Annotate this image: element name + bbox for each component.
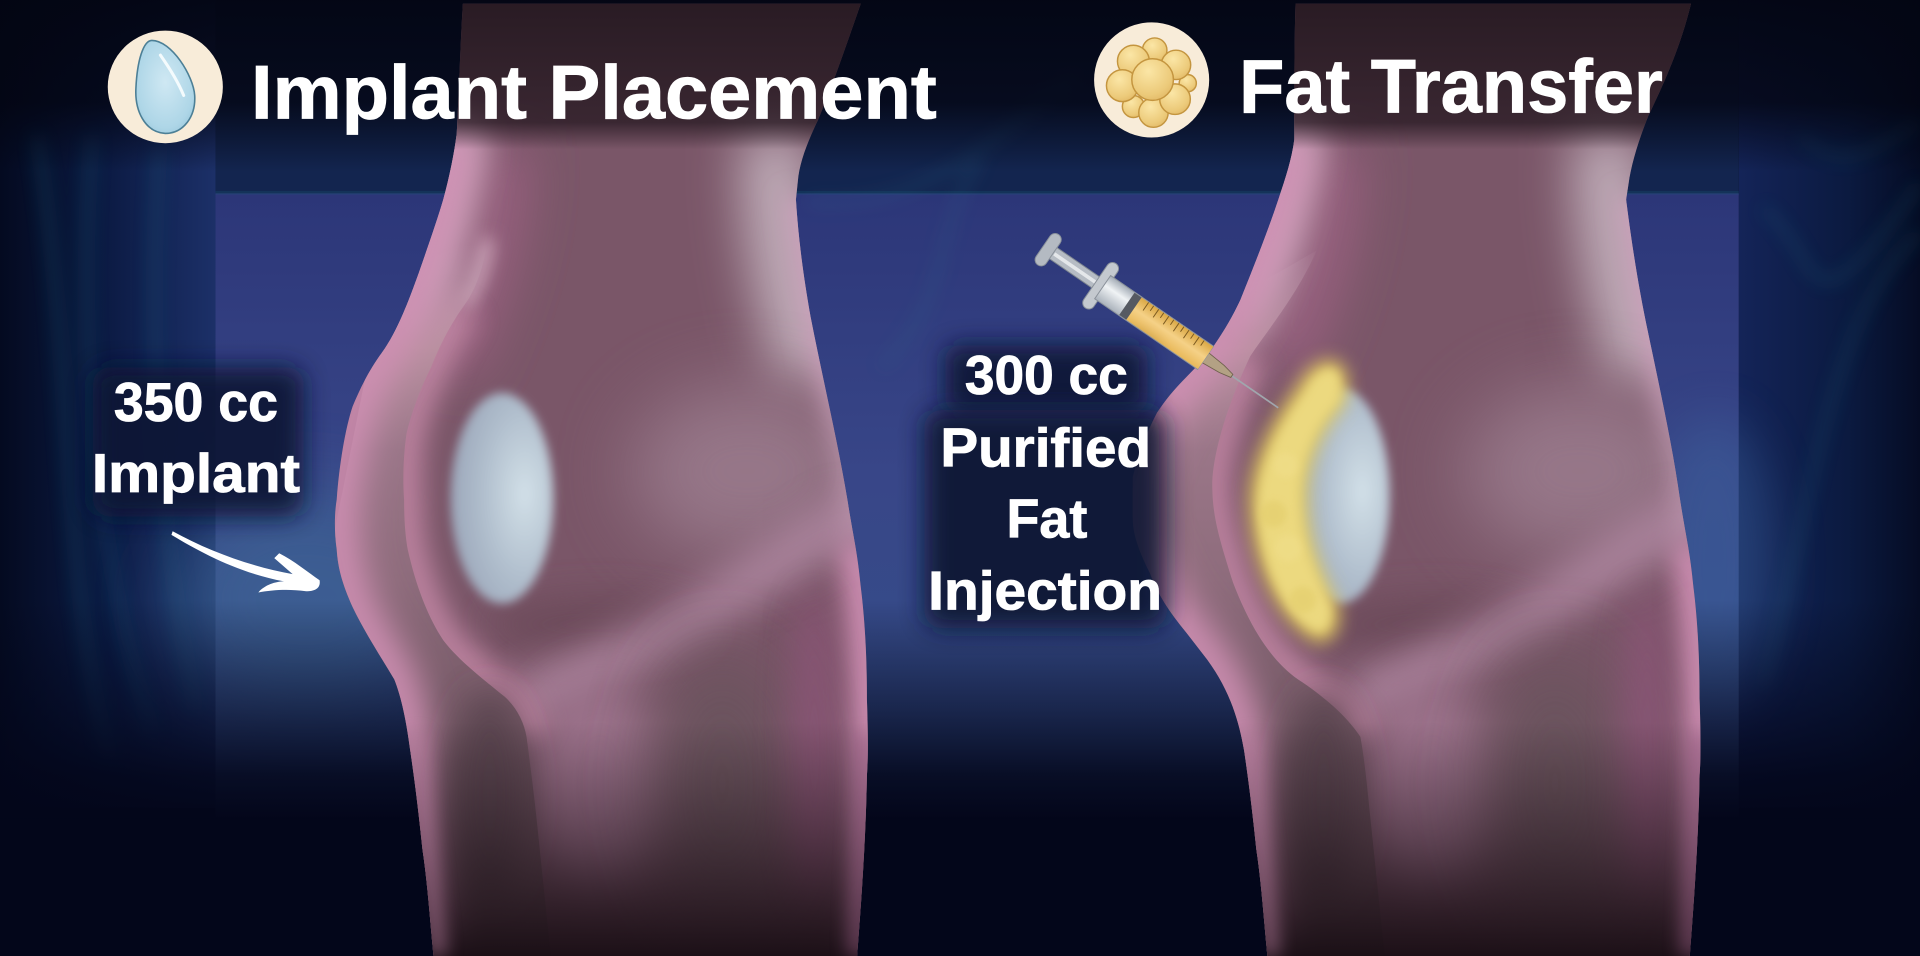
implant: right figure: [1292, 388, 1390, 603]
needle: [1228, 373, 1278, 408]
label: 300 cc Purified Fat Injection: Purified: [940, 416, 1151, 478]
plunger flange: [1033, 231, 1064, 268]
heading: Implant Placement: Implant Placement: [251, 51, 937, 136]
hub: [1200, 351, 1235, 381]
label: 300 cc Purified Fat Injection: Injection: [928, 560, 1162, 622]
label: 350 cc Implant: Implant: [92, 442, 300, 504]
body: left figure: [318, 0, 882, 956]
outer lobe and rear leg: [1162, 259, 1376, 956]
label: 300 cc Purified Fat Injection: Fat: [1007, 487, 1087, 549]
label: 300 cc Purified Fat Injection: 300 cc: [965, 344, 1128, 406]
label: 300 cc Purified Fat Injection: [924, 344, 1167, 628]
heading icon: implant: [108, 31, 223, 143]
fat deposit crescent: [1248, 359, 1349, 643]
implant: left figure: [451, 393, 553, 603]
heading: Fat Transfer: Fat Transfer: [1239, 45, 1663, 130]
heading icon: fat cells: [1094, 22, 1209, 137]
body: right figure: [1102, 0, 1714, 956]
outer lobe and rear leg: [335, 265, 542, 956]
barrel: [1095, 276, 1214, 369]
arrow: implant label to body: [171, 531, 320, 592]
syringe: [1028, 224, 1294, 430]
plunger rod: [1044, 244, 1113, 297]
barrel flange: [1080, 260, 1121, 311]
graduations: [1143, 302, 1204, 349]
label: 350 cc Implant: [92, 367, 304, 517]
fluid: [1125, 297, 1213, 369]
label: 350 cc Implant: 350 cc: [114, 371, 278, 433]
